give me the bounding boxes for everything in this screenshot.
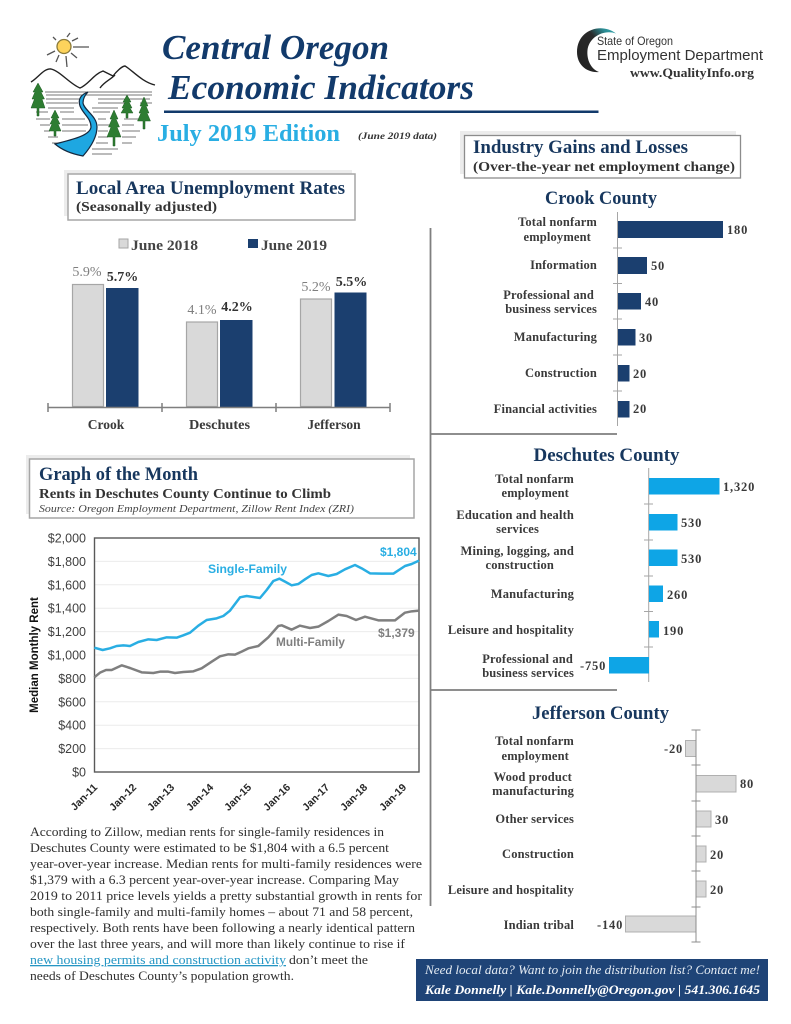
- x axis labels: Jan-11: [69, 782, 100, 813]
- values: 5.7%: [107, 270, 138, 285]
- legend: June 2018: [131, 238, 198, 254]
- x axis labels: Jan-12: [107, 782, 139, 814]
- category labels: Information: [530, 258, 597, 272]
- values: 30: [715, 813, 729, 827]
- heading: Jefferson County: [532, 704, 670, 724]
- y axis labels: $1,400: [48, 602, 86, 616]
- category labels: services: [496, 522, 539, 536]
- text block: rent commentary: 2019 to 2011 price levels yields a pretty substantial growth in rents for: [30, 888, 423, 903]
- values: 4.2%: [221, 300, 253, 315]
- y axis labels: $600: [58, 695, 86, 709]
- title: [162, 28, 474, 107]
- category labels: Total nonfarm: [495, 472, 574, 486]
- category labels: Total nonfarm: [518, 215, 597, 229]
- icon: sun: [47, 33, 89, 67]
- y axis labels: $1,800: [48, 555, 86, 569]
- y axis labels: $2,000: [48, 532, 86, 546]
- x axis labels: Jan-13: [145, 782, 177, 814]
- x axis labels: [69, 782, 409, 814]
- legend: June 2019: [261, 238, 327, 254]
- data month note: (June 2019 data): [358, 131, 437, 142]
- category labels: Construction: [502, 847, 574, 861]
- values: 5.5%: [336, 275, 367, 290]
- category labels: [448, 472, 575, 680]
- text block: rent commentary: [30, 824, 423, 983]
- axis: [644, 468, 653, 682]
- icon: crescent arc: [577, 28, 616, 72]
- y axis labels: $1,600: [48, 578, 86, 592]
- logo wordmark: state: State of Oregon: [597, 34, 673, 48]
- icon: land lines: [36, 92, 152, 154]
- category labels: Deschutes: [189, 417, 250, 432]
- chart: median monthly rent: [29, 532, 419, 814]
- category labels: employment: [524, 230, 592, 244]
- text block: rent commentary: According to Zillow, median rents for single-family residences in: [30, 824, 385, 839]
- website: www.QualityInfo.org: [630, 65, 755, 80]
- x axis labels: Jan-16: [261, 782, 293, 814]
- callout: contact banner: Need local data? Want to join the distribution list? Contact me!: [424, 962, 760, 977]
- section dividers: [430, 228, 617, 906]
- series labels: Multi-Family: [276, 635, 345, 649]
- y axis labels: [48, 532, 86, 780]
- category labels: [494, 215, 598, 416]
- category labels: Crook: [88, 417, 125, 432]
- y axis labels: $0: [72, 766, 86, 780]
- values: 5.9%: [72, 265, 102, 280]
- line: single-family: [94, 561, 419, 650]
- category labels: Financial activities: [494, 402, 597, 416]
- category labels: business services: [482, 666, 574, 680]
- text block: rent commentary: Deschutes County were estimated to be $1,804 with a 6.5 percent: [30, 840, 389, 855]
- text block: rent commentary: year-over-year increase. Median rents for multi-family residences were: [30, 856, 422, 871]
- title rule: [164, 110, 598, 113]
- logo wordmark: department: Employment Department: [597, 47, 764, 64]
- text block: rent commentary: new housing permits and construction activity: [30, 952, 287, 967]
- bars: [618, 221, 723, 418]
- axis: [692, 730, 700, 942]
- panel: graph of the month heading: [26, 455, 414, 518]
- text block: rent commentary: don’t meet the: [289, 952, 368, 967]
- panel: Deschutes County: [448, 446, 755, 682]
- values: 20: [633, 367, 647, 381]
- callout: contact banner: [416, 959, 768, 1001]
- panel: industry gains heading: [460, 131, 740, 178]
- panel: graph of the month heading: Rents in Deschutes County Continue to Climb: [39, 487, 331, 502]
- values: 260: [667, 588, 688, 602]
- category labels: Wood product: [494, 770, 573, 784]
- values: [597, 742, 754, 932]
- panel: graph of the month heading: Source: Oregon Employment Department, Zillow Rent Index (ZRI): [39, 503, 354, 515]
- category labels: Professional and: [503, 288, 594, 302]
- bars: [626, 740, 736, 932]
- text block: rent commentary: needs of Deschutes County’s population growth.: [30, 968, 294, 983]
- icon: pine trees: [31, 83, 150, 146]
- title: Economic Indicators: [167, 68, 474, 107]
- category labels: manufacturing: [492, 784, 575, 798]
- y axis labels: $200: [58, 742, 86, 756]
- bars: [609, 478, 720, 674]
- values: 30: [639, 331, 653, 345]
- values: 180: [727, 223, 748, 237]
- values: -750: [580, 659, 606, 673]
- values: 530: [681, 516, 702, 530]
- bars: June 2019: [106, 288, 366, 407]
- category labels: employment: [502, 749, 570, 763]
- values: 20: [710, 883, 724, 897]
- category labels: Manufacturing: [514, 330, 598, 344]
- values: 50: [651, 259, 665, 273]
- axis: [48, 403, 390, 412]
- callout: contact banner: Kale Donnelly | Kale.Donnelly@Oregon.gov | 541.306.1645: [424, 982, 761, 997]
- text block: rent commentary: $1,379 with a 6.3 percent year-over-year increase. Comparing May: [30, 872, 400, 887]
- text block: rent commentary: both single-family and multi-family homes – about 71 and 58 percent,: [30, 904, 413, 919]
- panel: graph of the month heading: Graph of the Month: [39, 465, 199, 485]
- values: 190: [663, 624, 684, 638]
- panel: unemployment heading: [64, 170, 355, 220]
- x axis labels: Jan-15: [222, 782, 254, 814]
- edition heading: July 2019 Edition: [157, 121, 340, 147]
- category labels: Education and health: [456, 508, 574, 522]
- panel: industry gains heading: (Over-the-year net employment change): [473, 160, 735, 175]
- category labels: employment: [502, 486, 570, 500]
- icon: mountains: [31, 66, 155, 88]
- values: [72, 265, 367, 318]
- values: 40: [645, 295, 659, 309]
- panel: Crook County: [494, 189, 748, 426]
- category labels: [448, 734, 575, 932]
- values: 1,320: [723, 480, 755, 494]
- y axis labels: $1,200: [48, 625, 86, 639]
- values: 20: [633, 402, 647, 416]
- x axis labels: Jan-14: [184, 782, 216, 814]
- icon: river: [55, 92, 97, 156]
- y axis labels: $800: [58, 672, 86, 686]
- y axis labels: $400: [58, 719, 86, 733]
- panel: unemployment heading: Local Area Unemployment Rates: [76, 179, 345, 199]
- category labels: Mining, logging, and: [461, 544, 574, 558]
- text block: rent commentary: respectively. Both rents have been following a nearly identical pattern: [30, 920, 416, 935]
- logo: Employment Department: [577, 28, 764, 80]
- chart: unemployment rates: [48, 238, 390, 432]
- values: -140: [597, 918, 623, 932]
- x axis labels: Jan-18: [338, 782, 370, 814]
- legend: [119, 238, 327, 254]
- category labels: Total nonfarm: [495, 734, 574, 748]
- category labels: construction: [486, 558, 554, 572]
- category labels: Manufacturing: [491, 587, 575, 601]
- category labels: Indian tribal: [504, 918, 574, 932]
- series labels: Single-Family: [208, 562, 287, 576]
- series labels: [208, 545, 417, 649]
- values: 80: [740, 777, 754, 791]
- bars: June 2018: [72, 284, 332, 406]
- text block: rent commentary: over the last three years, and will more than likely continue to rise if: [30, 936, 406, 951]
- heading: Crook County: [545, 189, 658, 209]
- category labels: Construction: [525, 366, 597, 380]
- values: 4.1%: [187, 303, 217, 318]
- values: [580, 480, 755, 673]
- category labels: business services: [505, 302, 597, 316]
- panel: industry gains heading: Industry Gains and Losses: [473, 138, 688, 158]
- panel: Jefferson County: [448, 704, 754, 942]
- x axis labels: Jan-19: [377, 782, 409, 814]
- axis: [613, 212, 622, 426]
- values: 5.2%: [301, 280, 331, 295]
- y axis labels: $1,000: [48, 648, 86, 662]
- values: 20: [710, 848, 724, 862]
- series labels: $1,379: [378, 626, 415, 640]
- values: 530: [681, 552, 702, 566]
- panel: unemployment heading: (Seasonally adjusted): [76, 200, 217, 215]
- category labels: Professional and: [482, 652, 573, 666]
- category labels: Leisure and hospitality: [448, 883, 575, 897]
- line: multi-family: [94, 611, 419, 677]
- category labels: Leisure and hospitality: [448, 623, 575, 637]
- values: [633, 223, 748, 416]
- title: Central Oregon: [162, 28, 389, 67]
- series labels: $1,804: [380, 545, 417, 559]
- category labels: Jefferson: [307, 417, 361, 432]
- category labels: Other services: [495, 812, 574, 826]
- heading: Deschutes County: [534, 446, 680, 466]
- category labels: [88, 417, 361, 432]
- x axis labels: Jan-17: [300, 782, 332, 814]
- logo: sun, mountains, river and trees: [31, 33, 155, 156]
- y axis title: Median Monthly Rent: [29, 597, 41, 713]
- values: -20: [664, 742, 683, 756]
